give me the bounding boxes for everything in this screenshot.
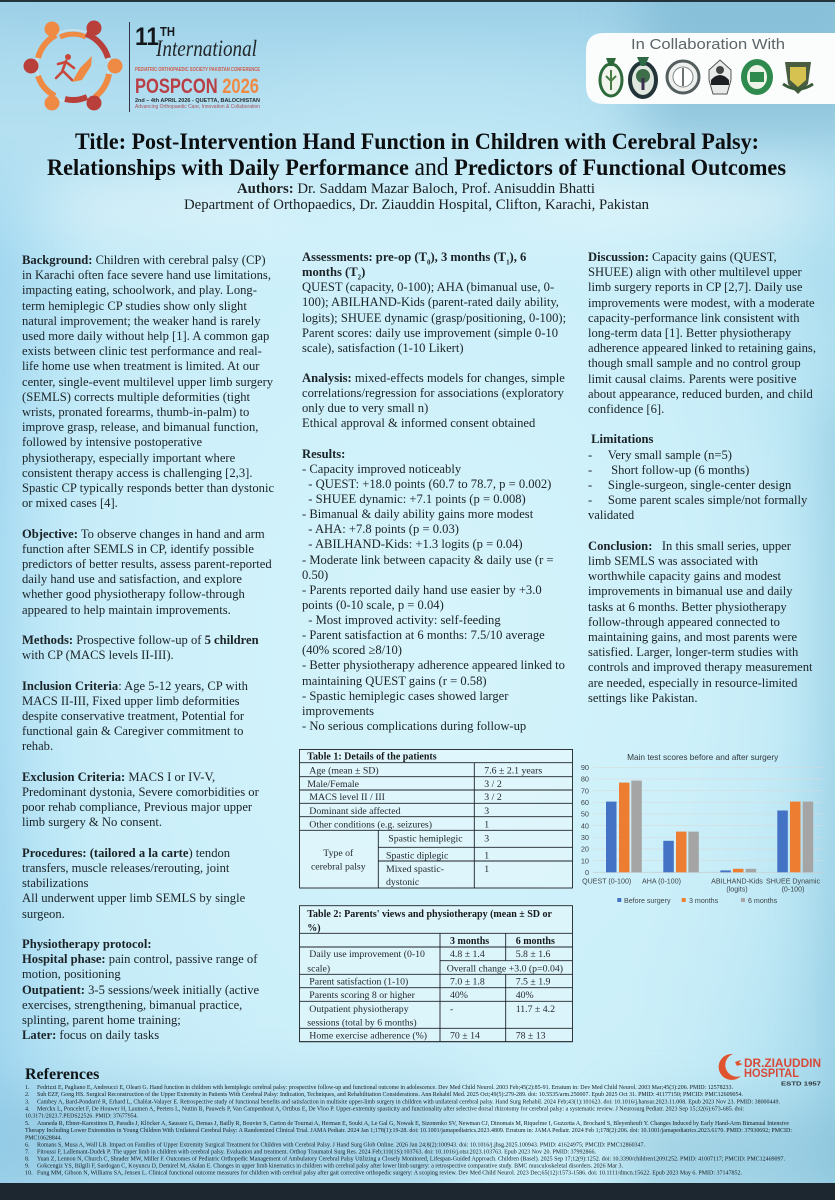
table 2 rows: 6 months	[516, 936, 555, 947]
ref 4: 4.	[25, 1106, 30, 1112]
text: results: - AHA: +7.8 points (p = 0.03)	[308, 522, 459, 536]
ref 5	[25, 1120, 792, 1141]
text: background: Spastic CP typically responds better than dystonic	[22, 481, 274, 495]
text: background: Background: Children with cerebral palsy (CP)	[22, 253, 266, 267]
y axis labels: 50	[581, 810, 589, 819]
table 1 rows: Spastic diplegic	[386, 850, 449, 861]
text: procedures: Procedures: (tailored a la carte) tendon	[22, 846, 230, 860]
superscript TH: TH	[160, 24, 175, 39]
text: discussion: SHUEE) align with other multilevel upper	[588, 265, 802, 279]
ref 7: 7.	[25, 1149, 30, 1155]
table 1 rows: 3 / 2	[484, 792, 502, 803]
text: exclusion criteria: poor rehab compliance, Previous major upper	[22, 800, 252, 814]
text: background: exists between clinic test performance and real-	[22, 344, 262, 358]
text: results: (40% scored ≥8/10)	[302, 643, 402, 657]
table 1 rows: 3 / 2	[484, 779, 502, 790]
y axis labels: 20	[581, 845, 589, 854]
ref 7: Fitoussi F, Lallemant-Dudek P. The upper limb in children with cerebral palsy. Evaluation and treatment. Orthop Traumatol Surg Res. 2024 Feb;110(1S):103763. doi: 10.1016/j.otsr.2023.103763. Epub 2023 Nov 20. PMID: 37992866.	[37, 1148, 596, 1155]
title	[47, 129, 786, 181]
text: discussion: confidence [6].	[588, 402, 664, 416]
text: discussion: improvements were modest, with a moderate	[588, 296, 815, 310]
text: background: center, single-event multilevel upper limb surgery	[22, 375, 273, 389]
ref 5: 5.	[25, 1121, 30, 1127]
table 1 rows: dystonic	[386, 877, 420, 888]
text: conclusion: controls and improved therapy measurement	[588, 660, 813, 674]
text: exclusion criteria: limb surgery & No consent.	[22, 815, 162, 829]
table 2 rows: 3 months	[450, 936, 489, 947]
table 2 rows: Parents scoring 8 or higher	[309, 990, 416, 1001]
text: conclusion: maintaining gains, and most parents were	[588, 630, 797, 644]
title line 2: Relationships with Daily Performance and Predictors of Functional Outcomes	[47, 154, 786, 181]
text: results: - Most improved activity: self-feeding	[308, 613, 501, 627]
text: physiotherapy protocol	[22, 937, 259, 1042]
text: procedures: transfers, muscle releases/rerouting, joint	[22, 861, 229, 875]
heading: references: References	[25, 1066, 99, 1083]
text: physiotherapy protocol: Later: focus on daily tasks	[22, 1028, 159, 1042]
text: assessments: 100); ABILHAND-Kids (parent-rated daily ability,	[302, 295, 559, 309]
table 1 rows	[307, 765, 542, 888]
text: background	[22, 253, 274, 510]
table 2 rows: Outpatient physiotherapy	[309, 1004, 409, 1015]
text: limitations: - Single-surgeon, single-center design	[588, 478, 791, 492]
text: assessments	[302, 250, 566, 355]
text: analysis: Ethical approval & informed consent obtained	[302, 416, 535, 430]
text: background: followed by intensive postoperative	[22, 435, 202, 449]
text: conclusion: follow-through appeared connected to	[588, 615, 780, 629]
category labels: SHUEE Dynamic	[766, 878, 820, 886]
collaboration heading: In Collaboration With	[631, 36, 785, 53]
y axis labels	[581, 763, 589, 877]
table 2 rows: 7.5 ± 1.9	[516, 977, 551, 988]
text: methods: with CP (MACS levels II-III).	[22, 648, 174, 662]
table 2 rows: 78 ± 13	[516, 1031, 546, 1042]
text: assessments: Assessments: pre-op (T0), 3 months (T1), 6	[302, 250, 526, 267]
text: background: consistent therapy access is challenging [2,3].	[22, 466, 252, 480]
text: objective: daily hand use and satisfaction, and explore	[22, 572, 242, 586]
y axis labels: 10	[581, 856, 589, 865]
y axis labels: 90	[581, 763, 589, 772]
text: discussion	[588, 250, 816, 416]
y axis labels: 80	[581, 775, 589, 784]
text: methods: Methods: Prospective follow-up of 5 children	[22, 633, 259, 647]
text: conclusion: improvements in bimanual use and daily	[588, 584, 793, 598]
text: conclusion: Conclusion: In this small series, upper	[588, 539, 791, 553]
text: analysis: correlations/regression for associations (exploratory	[302, 386, 564, 400]
table 1 rows: 1	[484, 850, 489, 861]
y axis labels: 60	[581, 798, 589, 807]
text: conclusion: are needed, especially in resource-limited	[588, 676, 797, 690]
bar chart: main test scores	[581, 752, 823, 905]
ref 5: PMC10628844.	[25, 1135, 62, 1141]
table 1 rows: cerebral palsy	[311, 861, 366, 872]
text: background: (SEMLS) corrects multiple deformities (tight	[22, 390, 250, 404]
established year: ESTD 1957	[781, 1082, 821, 1088]
text: background: improve grasp, release, and bimanual function,	[22, 420, 258, 434]
text: discussion: Discussion: Capacity gains (QUEST,	[588, 250, 777, 264]
text: physiotherapy protocol: motion, positioning	[22, 967, 121, 981]
text: objective: Objective: To observe changes in hand and arm	[22, 527, 265, 541]
text: discussion: long-term data [1]. Better physiotherapy	[588, 326, 791, 340]
text: objective: predictors of better results, assess parent-reported	[22, 557, 272, 571]
ref 10: 10.	[25, 1171, 33, 1177]
text: assessments: Parent scores: daily use improvement (simple 0-10	[302, 326, 558, 340]
text: results: 0.50)	[302, 568, 328, 582]
table 1 rows: Mixed spastic-	[386, 864, 444, 875]
text: results: - ABILHAND-Kids: +1.3 logits (p = 0.04)	[308, 537, 523, 551]
table 2 rows: scale)	[307, 964, 330, 975]
text: inclusion criteria: rehab.	[22, 739, 53, 753]
text: objective: function after SEMLS in CP, identify possible	[22, 542, 254, 556]
text: background: wrists, pronated forearms, thumb-in-palm) to	[22, 405, 249, 419]
series: 3 months	[619, 783, 800, 872]
icon: Dr. Ziauddin Hospital logo	[718, 1054, 821, 1088]
divider next to logo	[129, 22, 130, 112]
text: inclusion criteria: Inclusion Criteria: Age 5-12 years, CP with	[22, 679, 248, 693]
text: results: - Bimanual & daily ability gains more modest	[302, 507, 533, 521]
text: physiotherapy protocol: Hospital phase: pain control, passive range of	[22, 952, 257, 966]
text: results: - Parents reported daily hand use easier by +3.0	[302, 583, 542, 597]
text: exclusion criteria: Exclusion Criteria: MACS I or IV-V,	[22, 770, 215, 784]
table 1 rows: 3	[484, 834, 489, 845]
icon: badge 2	[630, 57, 656, 97]
ref 5: Araneda R, Ebner-Karestinos D, Paradis J, Klöcker A, Saussez G, Demas J, Bailly R, Bouvier S, Carton de Tournai A, Herman E, Souki A, Le Gal G, Nowak E, Sizonenko SV, Newman CJ, Dinomais M, Riquelme I, Guzzetta A, Brochard S, Bleyenheuft Y. Changes Induced by Early Hand-Arm Bimanual Intensive	[37, 1120, 789, 1127]
text: results: - Capacity improved noticeably	[302, 462, 461, 476]
table 2 rows: 4.8 ± 1.4	[450, 949, 485, 960]
text: background: natural improvement; the weaker hand is rarely	[22, 314, 260, 328]
table 1 title: Table 1: Details of the patients	[307, 751, 437, 762]
ref 4	[25, 1105, 744, 1120]
ref 1: Fedrizzi E, Pagliano E, Andreucci E, Oleari G. Hand function in children with hemiplegic cerebral palsy: prospective follow-up and functional outcome in adolescence. Dev Med Child Neurol. 2003 Feb;45(2):85-91. Erratum in: Dev Med Child Neurol. 2003 Mar;45(3):206. PMID: 12578233.	[37, 1084, 733, 1091]
table 1 rows: 1	[484, 864, 489, 875]
text: objective	[22, 527, 272, 617]
POSPCON 2026: POSPCON 2026	[135, 75, 259, 98]
table 1 rows: 3	[484, 806, 489, 817]
text: inclusion criteria	[22, 679, 248, 753]
text: limitations: - Short follow-up (6 months)	[588, 463, 749, 477]
text: conclusion: settings like Pakistan.	[588, 691, 698, 705]
text: discussion: adherence appeared linked to retaining gains,	[588, 341, 816, 355]
text: inclusion criteria: MACS II-III, Fixed upper limb deformities	[22, 694, 240, 708]
text: background: life home use when treatment is limited. At our	[22, 359, 259, 373]
text: conclusion: tasks at 6 months. Better physiotherapy	[588, 600, 787, 614]
table 2 rows: Overall change +3.0 (p=0.04)	[447, 964, 563, 975]
table 1 rows: Dominant side affected	[309, 806, 401, 817]
ref 4: Merckx L, Poncelet F, De Houwer H, Laumen A, Peeters L, Nuttin B, Pauwels P, Van Campenhout A, Ortibus E, De Vloo P. Upper-extremity spasticity and functionality after selective dorsal rhizotomy for cerebral palsy: a systematic review. J Neurosurg Pediatr. 2023 Sep 15;32(6):673-685. doi:	[37, 1105, 744, 1112]
y axis labels: 70	[581, 786, 589, 795]
ref 6: 6.	[25, 1142, 30, 1148]
text: results	[302, 447, 565, 733]
ref 8: 8.	[25, 1157, 30, 1163]
tagline: Advancing Orthopaedic Care, Innovation & Collaboration	[135, 104, 260, 110]
panel: left column	[22, 253, 274, 1042]
table 2 rows: Parent satisfaction (1-10)	[309, 977, 408, 988]
text: objective: whether good physiotherapy follow-through	[22, 587, 245, 601]
legend: 6 months	[748, 897, 778, 905]
text: discussion: capacity-performance link consistent with	[588, 311, 800, 325]
category labels: QUEST (0-100)	[582, 878, 631, 886]
table 1 rows: MACS level II / III	[309, 792, 385, 803]
legend	[617, 897, 778, 905]
text: discussion: limit causal claims. Parents were positive	[588, 372, 796, 386]
chart title: Main test scores before and after surgery	[627, 752, 779, 762]
text: background: term hemiplegic CP studies show only slight	[22, 299, 247, 313]
table 1 rows: 1	[484, 819, 489, 830]
text: inclusion criteria: functional gain & Caregiver commitment to	[22, 724, 243, 738]
text: results: - Spastic hemiplegic cases showed larger	[302, 689, 508, 703]
hospital name line 2: HOSPITAL	[744, 1066, 799, 1080]
table 2 rows: sessions (total by 6 months)	[307, 1017, 417, 1028]
text: physiotherapy protocol: Physiotherapy protocol:	[22, 937, 152, 951]
text: results: improvements	[302, 704, 374, 718]
text: results: - SHUEE dynamic: +7.1 points (p = 0.008)	[308, 492, 526, 506]
table 2 rows	[307, 936, 563, 1042]
text: limitations: Limitations	[591, 432, 653, 446]
text: procedures: stabilizations	[22, 876, 88, 890]
table 2 title: Table 2: Parents' views and physiotherapy (mean ± SD or	[307, 909, 552, 920]
ref 10: Fung MM, Gibson N, Williams SA, Jensen L. Clinical functional outcome measures for children with cerebral palsy after gait corrective orthopedic surgery: A scoping review. Dev Med Child Neurol. 2023 Dec;65(12):1573-1586. doi: 10.1111/dmcn.15622. Epub 2023 May 6. PMID: 37147852.	[37, 1170, 742, 1177]
text: discussion: about appearance, reduced burden, and child	[588, 387, 813, 401]
text: procedures: All underwent upper limb SEMLS by single	[22, 891, 245, 905]
text: discussion: limb surgery reports in CP [2,7]. Daily use	[588, 280, 802, 294]
text: objective: appeared to help maintain improvements.	[22, 603, 231, 617]
text: background: used more daily without help [1]. A common gap	[22, 329, 269, 343]
table 1 rows: Male/Female	[307, 779, 360, 790]
series: 6 months	[631, 781, 813, 872]
ref 4: 10.3171/2023.7.PEDS22526. PMID: 37677954.	[25, 1114, 138, 1120]
hospital name line 1: DR.ZIAUDDIN	[744, 1056, 821, 1070]
icon: badge 3	[667, 61, 699, 93]
ref 9: 9.	[25, 1163, 30, 1169]
text: conclusion: satisfied. Larger, longer-term studies with	[588, 645, 798, 659]
table 2 rows: 40%	[516, 990, 534, 1001]
ref 2: Suh EZF, Gong HS. Surgical Reconstruction of the Upper Extremity in Patients With Cerebral Palsy: Indication, Techniques, and Rehabilitation Considerations. Ann Rehabil Med. 2025 Oct;49(5):279-289. doi: 10.5535/arm.250007. Epub 2025 Oct 31. PMID: 41177150; PMCID: PMC12609054.	[37, 1091, 743, 1098]
text: assessments: QUEST (capacity, 0-100); AHA (bimanual use, 0-	[302, 280, 554, 294]
society line: PEDIATRIC ORTHOPAEDIC SOCIETY PAKISTAN CONFERENCE	[135, 67, 260, 73]
ref 5: Therapy Including Lower Extremities in Young Children With Unilateral Cerebral Palsy: A Randomized Clinical Trial. JAMA Pediatr. 2024 Jan 1;178(1):19-28. doi: 10.1001/jamapediatrics.2023.4809. Erratum in: JAMA Pediatr. 2024 Feb 1;178(2):206. doi: 10.1001/jamapediatrics.2023.6170. PMID: 37930692; PMCID:	[25, 1127, 792, 1134]
text: analysis: Analysis: mixed-effects models for changes, simple	[302, 371, 565, 385]
title line 1: Title: Post-Intervention Hand Function in Children with Cerebral Palsy:	[75, 129, 759, 155]
table 2 rows: 7.0 ± 1.8	[450, 977, 485, 988]
y axis labels: 40	[581, 821, 589, 830]
text: physiotherapy protocol: exercises, strengthening, bimanual practice,	[22, 998, 242, 1012]
icon: badge 4	[709, 60, 731, 94]
legend: 3 months	[689, 897, 719, 905]
table 1: details of the patients	[299, 749, 573, 888]
text: exclusion criteria	[22, 770, 259, 829]
series: before surgery	[606, 802, 788, 872]
text: analysis: only due to very small n)	[302, 401, 428, 415]
table 2 rows: Home exercise adherence (%)	[309, 1031, 427, 1042]
International script: International	[155, 36, 257, 61]
table 1 rows: 7.6 ± 2.1 years	[484, 765, 542, 776]
ref 6: Romans S, Musa A, Wall LB. Impact on Families of Upper Extremity Surgical Treatment for Children with Cerebral Palsy. J Hand Surg Glob Online. 2026 Jan 24;8(2):100943. doi: 10.1016/j.jhsg.2025.100943. PMID: 41624975; PMCID: PMC12860347.	[37, 1141, 645, 1148]
table 2 rows: -	[450, 1004, 453, 1015]
text: physiotherapy protocol: Outpatient: 3-5 sessions/week initially (active	[22, 983, 259, 997]
ref 9: Gokcengiz YS, Bilgili F, Sardogan C, Koyuncu D, Demirel M, Akalan E. Changes in upper limb kinematics in children with cerebral palsy after lower limb surgery: a retrospective comparative study. BMC musculoskeletal disorders. 2026 Mar 3.	[37, 1162, 623, 1169]
text: procedures	[22, 846, 245, 921]
text: physiotherapy protocol: splinting, parent home training;	[22, 1013, 181, 1027]
panel: in collaboration with	[586, 33, 835, 104]
ref 1: 1.	[25, 1085, 30, 1091]
table 2 title: %)	[307, 923, 321, 934]
legend: Before surgery	[624, 897, 671, 905]
table 1 rows: Age (mean ± SD)	[309, 765, 379, 776]
panel: right column	[588, 250, 816, 705]
text: methods	[22, 633, 259, 662]
text: analysis	[302, 371, 565, 430]
author names: Authors: Dr. Saddam Mazar Baloch, Prof. Anisuddin Bhatti	[237, 181, 595, 197]
icon: badge 5	[741, 59, 773, 95]
ref 8: Yuan Z, Lennon N, Church C, Shrader MW, Miller F. Outcomes of Pediatric Orthopedic Management of Ambulatory Cerebral Palsy Utilizing a Closely Monitored, Lifespan-Guided Approach. Children (Basel). 2025 Sep 17;12(9):1252. doi: 10.3390/children12091252. PMID: 41007117; PMCID: PMC12469097.	[37, 1156, 785, 1163]
table 2 rows: 11.7 ± 4.2	[516, 1004, 555, 1015]
icon: badge 6	[783, 62, 813, 94]
category labels: (0-100)	[782, 886, 804, 894]
text: results: maintaining QUEST gains (r = 0.58)	[302, 674, 487, 688]
text: assessments: logits); SHUEE dynamic (grasp/positioning, 0-100);	[302, 310, 566, 324]
text: conclusion: worthwhile capacity gains and modest	[588, 569, 781, 583]
text: procedures: surgeon.	[22, 907, 65, 921]
text: limitations: validated	[588, 508, 634, 522]
icon: POSPCON conference logo ring	[24, 20, 122, 110]
table 2: parents' views and physiotherapy	[299, 905, 573, 1042]
text: conclusion: limb SEMLS was associated with	[588, 554, 758, 568]
text: background: or mixed cases [4].	[22, 496, 118, 510]
category labels: (logits)	[726, 886, 748, 894]
text: results: points (0-10 scale, p = 0.04)	[302, 598, 444, 612]
ref 3: Cambey A, Bard-Pondarré R, Erhard L, Chaléat-Valayer E. Retrospective study of functional benefits and satisfaction in multisite upper-limb surgery in children with unilateral cerebral palsy. Hand Surg Rehabil. 2024 Feb;43(1):101623. doi: 10.1016/j.hansur.2023.11.008. Epub 2023 Nov 23. PMID: 38000449.	[37, 1099, 780, 1106]
table 2 rows: 40%	[450, 990, 468, 1001]
text: background: physiotherapy, especially important where	[22, 451, 235, 465]
text: exclusion criteria: Predominant dystonia, Severe comorbidities or	[22, 785, 259, 799]
y axis labels: 0	[585, 868, 589, 877]
text: results: - Parent satisfaction at 6 months: 7.5/10 average	[302, 628, 545, 642]
authors	[184, 181, 649, 213]
text: results: - Moderate link between capacity & daily use (r =	[302, 552, 554, 566]
y axis labels: 30	[581, 833, 589, 842]
ref 3: 3.	[25, 1100, 30, 1106]
department: Department of Orthopaedics, Dr. Ziauddin Hospital, Clifton, Karachi, Pakistan	[184, 197, 649, 213]
table 2 rows: Daily use improvement (0-10	[309, 949, 425, 960]
text: background: impacting eating, schoolwork, and play. Long-	[22, 283, 257, 297]
category labels	[582, 878, 820, 894]
conference name block	[135, 23, 260, 110]
top edge bar	[0, 0, 835, 2]
text: limitations: - Some parent scales simple/not formally	[588, 493, 807, 507]
text: limitations: - Very small sample (n=5)	[588, 448, 732, 462]
table 1 rows: Spastic hemiplegic	[388, 834, 463, 845]
category labels: AHA (0-100)	[642, 878, 681, 886]
text: discussion: though small sample and no control group	[588, 356, 801, 370]
text: results: Results:	[302, 447, 345, 461]
text: assessments: months (T2)	[302, 265, 365, 282]
category labels: ABILHAND-Kids	[711, 878, 763, 886]
date line: 2nd – 4th APRIL 2026 - QUETTA, BALOCHISTAN	[135, 98, 260, 104]
table 1 rows: Type of	[323, 848, 354, 859]
reference list	[25, 1084, 792, 1177]
11TH: 11	[135, 23, 159, 51]
text: results: - Better physiotherapy adherence appeared linked to	[302, 658, 565, 672]
ref 2: 2.	[25, 1092, 30, 1098]
table 2 rows: 5.8 ± 1.6	[516, 949, 551, 960]
text: inclusion criteria: despite conservative treatment, Potential for	[22, 709, 244, 723]
table 2 rows: 70 ± 14	[450, 1031, 480, 1042]
bottom dark bar	[0, 1183, 835, 1200]
text: assessments: scale), satisfaction (1-10 Likert)	[302, 341, 464, 355]
text: results: - QUEST: +18.0 points (60.7 to 78.7, p = 0.002)	[308, 477, 551, 491]
icon: badge 1	[600, 58, 622, 96]
text: results: - No serious complications during follow-up	[302, 719, 526, 733]
text: conclusion	[588, 539, 813, 705]
panel: center column	[302, 250, 566, 733]
text: limitations	[588, 432, 808, 522]
table 1 rows: Other conditions (e.g. seizures)	[309, 819, 432, 830]
text: background: in Karachi often face severe hand use limitations,	[22, 268, 271, 282]
